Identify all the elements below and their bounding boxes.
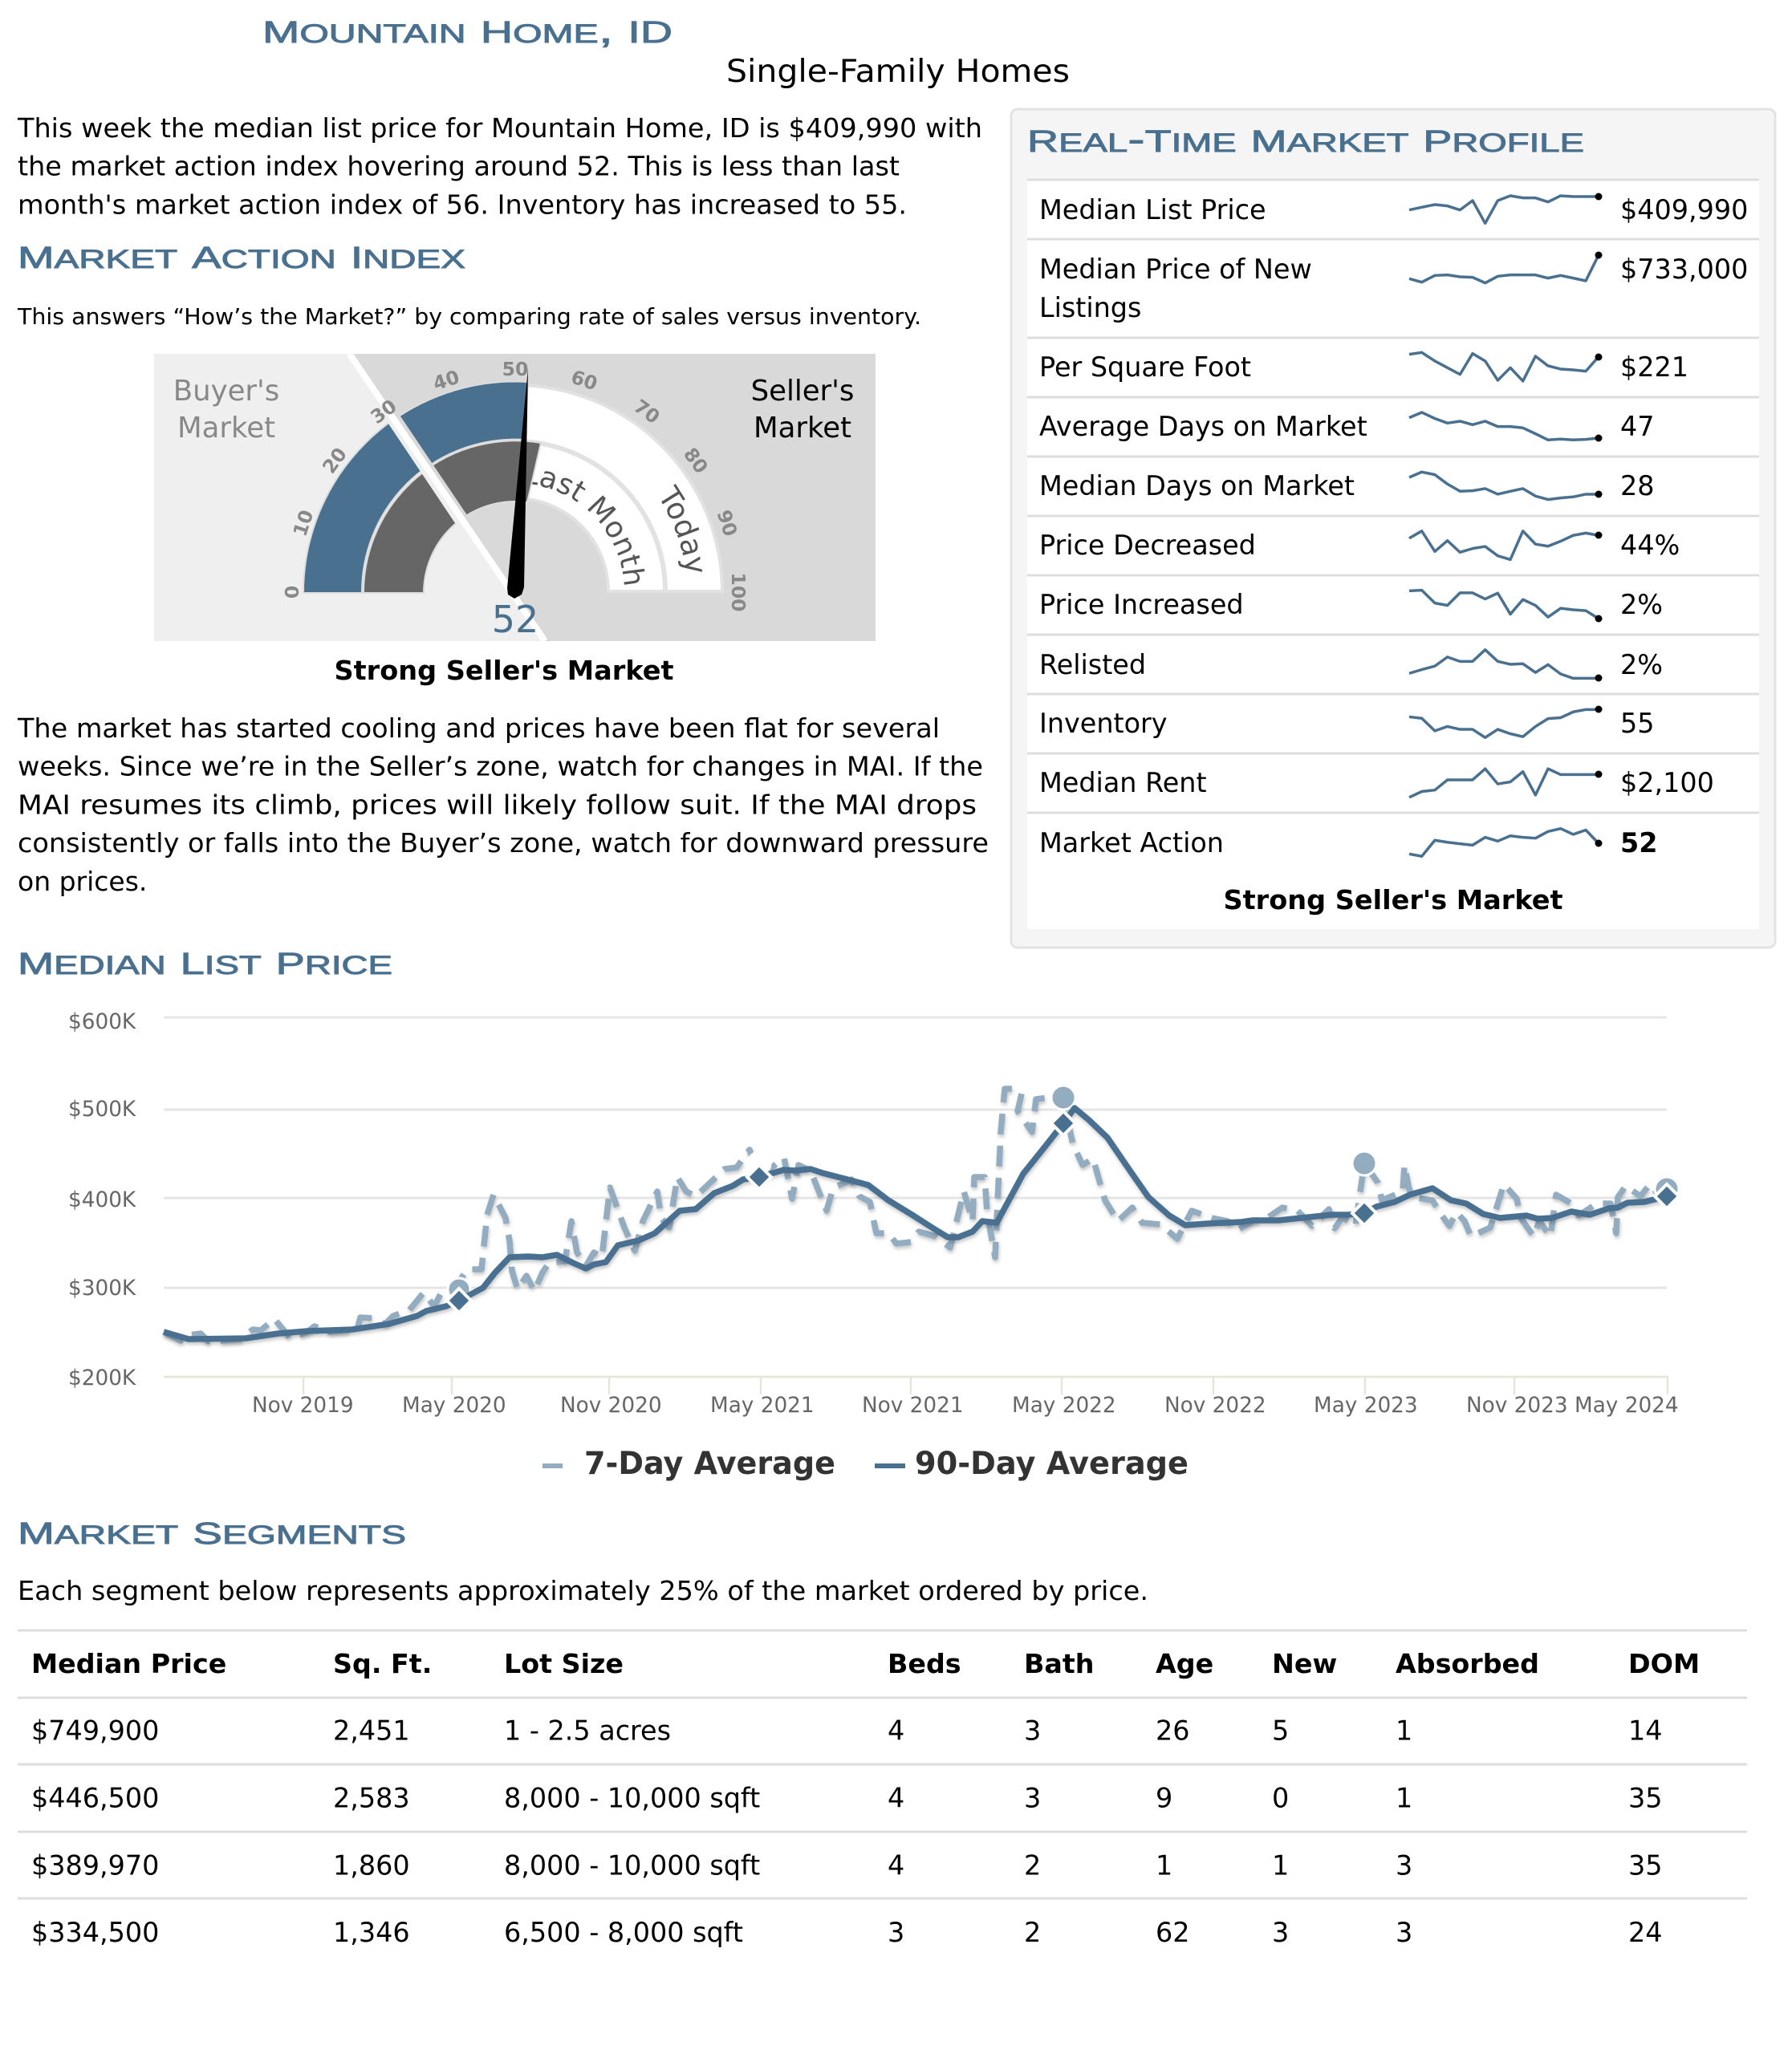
row: median rent [1039,767,1714,798]
arc: today value [303,423,421,594]
row: relisted: Relisted [1039,649,1146,680]
table row 4: 3 [888,1917,904,1948]
table: market segments [18,1630,1747,1948]
table row 1: 14 [1628,1715,1663,1746]
legend label: 7-day: 7-Day Average [584,1446,835,1482]
series: 90-day average [164,1108,1667,1339]
title: M ountain H ome, ID [262,10,673,51]
row: inventory [1039,706,1655,739]
subtitle: Single-Family Homes [726,54,1070,90]
markers: 7-day average [448,1086,1679,1301]
label: buyer's market [173,375,279,444]
row: price decreased [1039,530,1680,561]
x axis labels [252,1394,1679,1418]
row: median price of new listings: Median Price of New [1039,254,1312,285]
table row 1: 2,451 [333,1715,410,1746]
table row 2: $446,500 [31,1783,159,1813]
table row 4: 62 [1156,1917,1189,1948]
table header: Age [1156,1648,1213,1679]
row: per square foot: $221 [1620,351,1688,383]
description: market segments: Each segment below represents approximately 25% of the market ordered by price. [18,1575,1148,1606]
tick labels: 30 [367,395,400,428]
table row 3 [31,1850,1663,1881]
commentary text: MAI resumes its climb, prices will likely follow suit. If the MAI drops [18,789,977,820]
line chart: median list price [68,1010,1679,1418]
table row 2: 35 [1628,1783,1663,1813]
label: today arc: Today [661,484,703,572]
commentary text: consistently or falls into the Buyer’s zone, watch for downward pressure [18,827,989,859]
x axis labels: Nov 2021 [862,1394,964,1418]
table header: Sq. Ft. [333,1648,432,1679]
x axis labels: Nov 2019 [252,1394,354,1418]
y axis labels: $300K [68,1277,136,1301]
table row 4: 3 [1272,1917,1289,1948]
tick labels: 0 [281,586,303,599]
heading: real-time market profile: R eal- Time M arket Profile [1027,119,1584,160]
arc: today value above 30 [400,382,528,464]
table row 1: 4 [888,1715,904,1746]
table row 4: 3 [1396,1917,1412,1948]
table header: Beds [888,1648,961,1679]
x axis labels: Nov 2020 [560,1394,662,1418]
y axis labels: $500K [68,1098,136,1122]
table row 2: 4 [888,1783,904,1813]
y axis labels: $400K [68,1188,136,1212]
table row 4: 2 [1024,1917,1041,1948]
label: buyer's market: Buyer's [173,375,279,408]
table row 2: 1 [1396,1783,1412,1813]
label: last month arc: Last Month [532,471,645,585]
table row 4 [31,1917,1663,1948]
table row 2: 9 [1156,1783,1172,1813]
table header: New [1272,1648,1337,1679]
tick labels: 40 [430,366,462,395]
row: per square foot: Per Square Foot [1039,351,1251,383]
row: price decreased: 44% [1620,530,1680,561]
tick labels: 70 [630,395,664,428]
row: relisted: 2% [1620,649,1663,680]
row: median days on market: 28 [1620,470,1655,501]
table row 2 [31,1783,1663,1813]
x axis labels: Nov 2023 [1466,1394,1568,1418]
table row 3: 4 [888,1850,904,1881]
table row 4: 1,346 [333,1917,410,1948]
label: seller's market: Seller's [751,375,854,408]
row: median days on market: Median Days on Market [1039,470,1355,501]
table row 2: 2,583 [333,1783,410,1813]
row: relisted [1039,649,1663,682]
commentary text: weeks. Since we’re in the Seller’s zone, watch for changes in MAI. If the [18,751,983,782]
table row 2: 0 [1272,1783,1289,1813]
description: market action index: This answers “How’s the Market?” by comparing rate of sales versus inventory. [17,303,921,330]
tick labels: 20 [318,444,351,477]
x axis labels: Nov 2022 [1164,1394,1266,1418]
table row 3: 2 [1024,1850,1041,1881]
intro text: month's market action index of 56. Inventory has increased to 55. [18,189,907,220]
table row 3: $389,970 [31,1850,159,1881]
legend [542,1446,1189,1482]
intro text: This week the median list price for Mountain Home, ID is $409,990 with [17,112,982,144]
panel caption: Strong Seller's Market [1223,884,1563,915]
label: buyer's market: Market [177,412,275,444]
heading: median list price: M edian List Price [18,941,392,982]
tick labels: 80 [679,444,713,477]
row: market action: 52 [1620,827,1657,859]
row: median days on market [1039,470,1655,501]
table row 3: 35 [1628,1850,1663,1881]
row: average days on market: Average Days on Market [1039,411,1367,442]
markers: 90-day average [447,1111,1679,1313]
row: inventory: Inventory [1039,708,1167,739]
arc: last month value above 30 [433,441,541,515]
tick labels: 10 [289,507,318,539]
commentary text: The market has started cooling and prices have been flat for several [17,712,940,744]
legend swatch: 90-day [875,1463,905,1468]
x axis labels: May 2022 [1012,1394,1116,1418]
table row 3: 3 [1396,1850,1412,1881]
tick labels: 50 [502,358,528,380]
legend swatch: 7-day [542,1463,563,1468]
row: average days on market: 47 [1620,411,1655,442]
y axis labels: $600K [68,1010,136,1034]
needle [507,368,528,599]
x axis labels: May 2024 [1575,1394,1679,1418]
table header: Median Price [31,1648,226,1679]
table header: Absorbed [1396,1648,1539,1679]
heading: market action index: M arket Action Index [18,235,465,276]
row: median list price [1039,193,1748,225]
heading: market segments: M arket S egments [18,1511,406,1552]
legend label: 90-day: 90-Day Average [915,1446,1189,1482]
tick labels [281,358,750,612]
table header [31,1648,1700,1679]
commentary text: on prices. [18,866,147,897]
table row 4: 6,500 - 8,000 sqft [504,1917,743,1948]
table header: Bath [1024,1648,1094,1679]
series: 7-day average [164,1089,1667,1342]
row: median rent: Median Rent [1039,767,1207,798]
table row 1 [31,1715,1663,1746]
row: per square foot [1039,351,1688,383]
tick labels: 90 [713,507,742,539]
white arcs: remaining range [515,385,722,591]
table row 3: 1 [1156,1850,1172,1881]
label: seller's market: Market [754,412,851,444]
table row 1: 26 [1156,1715,1189,1746]
intro text [17,112,982,220]
table row 1: 5 [1272,1715,1289,1746]
table row 3: 1,860 [333,1850,410,1881]
x axis labels: May 2023 [1314,1394,1418,1418]
tick labels: 60 [568,366,600,395]
row: inventory: 55 [1620,708,1655,739]
row: median price of new listings: $733,000 [1620,254,1748,285]
table row 1: 1 - 2.5 acres [504,1715,671,1746]
table row 3: 8,000 - 10,000 sqft [504,1850,760,1881]
row: median list price: Median List Price [1039,194,1266,225]
table row 1: 1 [1396,1715,1412,1746]
intro text: the market action index hovering around 52. This is less than last [18,151,900,181]
row: median list price: $409,990 [1620,194,1748,225]
row: market action [1039,827,1657,859]
row: median rent: $2,100 [1620,767,1714,798]
x axis labels: May 2020 [402,1394,506,1418]
y axis labels: $200K [68,1366,136,1390]
row: price decreased: Price Decreased [1039,530,1256,561]
row: price increased: Price Increased [1039,589,1244,620]
row: price increased: 2% [1620,589,1663,620]
row: median price of new listings [1039,252,1748,323]
value: 52: 52 [492,598,538,641]
table header: Lot Size [504,1648,624,1679]
row: price increased [1039,589,1663,623]
row: median price of new listings: Listings [1039,292,1141,323]
tick labels: 100 [727,572,750,612]
table row 2: 8,000 - 10,000 sqft [504,1783,760,1813]
table row 3: 1 [1272,1850,1289,1881]
arc: last month value [363,473,456,594]
table row 1: 3 [1024,1715,1041,1746]
grid lines and axis [164,1017,1668,1394]
y axis labels [68,1010,136,1390]
table row 1: $749,900 [31,1715,159,1746]
x axis labels: May 2021 [710,1394,815,1418]
row: average days on market [1039,411,1655,442]
panel: real-time market profile [1011,109,1775,948]
label: seller's market [751,375,854,444]
commentary text [17,712,989,897]
table header: DOM [1628,1648,1700,1679]
table row 2: 3 [1024,1783,1041,1813]
gauge: market action index [154,354,876,641]
table row 4: $334,500 [31,1917,159,1948]
row: market action: Market Action [1039,827,1224,859]
table row 4: 24 [1628,1917,1663,1948]
gauge caption: Strong Seller's Market [334,655,674,686]
